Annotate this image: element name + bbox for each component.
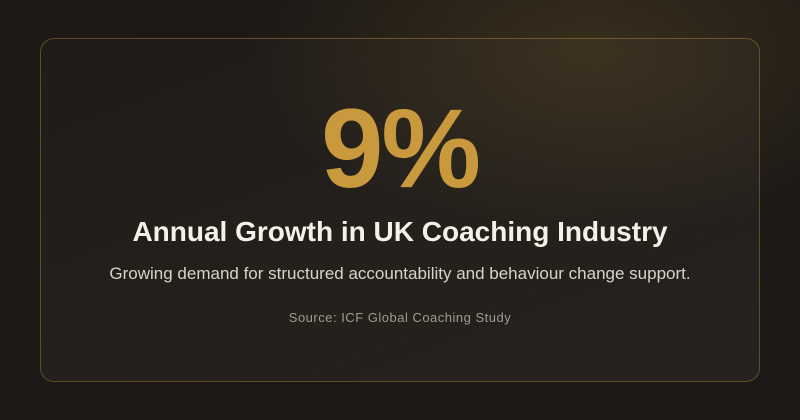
panel: stat card <box>40 38 760 382</box>
description text: Growing demand for structured accountability and behaviour change support. <box>109 264 691 283</box>
source note: Source: ICF Global Coaching Study <box>289 310 511 325</box>
big stat: 9%: 9% <box>321 86 479 211</box>
heading: Annual Growth in UK Coaching Industry <box>132 216 668 247</box>
